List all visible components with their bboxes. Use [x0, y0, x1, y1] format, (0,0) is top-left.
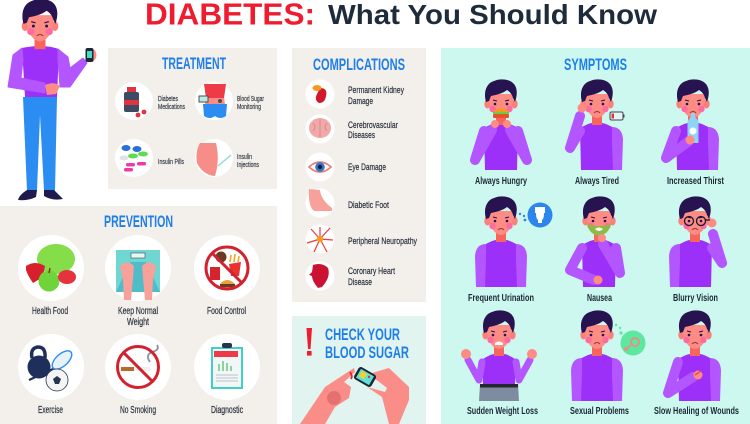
- symptom: blurry vision: Blurry Vision: [673, 292, 718, 304]
- item: diabetes medications: Diabetes: [158, 94, 178, 103]
- item: eye damage: [306, 152, 386, 182]
- symptom: sudden weight loss: [461, 310, 538, 417]
- item: diabetes medications: [115, 82, 185, 120]
- item: exercise: [18, 334, 84, 416]
- item: kidney damage: Damage: [348, 96, 373, 107]
- item: food control: Food Control: [207, 306, 246, 317]
- item: cerebrovascular diseases: Diseases: [348, 130, 375, 141]
- symptom: sexual problems: Sexual Problems: [570, 405, 629, 417]
- item: insulin pills: [115, 139, 184, 177]
- heading: prevention: PREVENTION: [104, 212, 173, 231]
- symptom: increased thirst: [666, 79, 724, 187]
- item: diagnostic: [194, 334, 260, 416]
- item: diagnostic: Diagnostic: [211, 405, 243, 416]
- item: peripheral neuropathy: [306, 224, 417, 254]
- item: kidney damage: [306, 80, 404, 108]
- item: coronary heart disease: [306, 262, 395, 290]
- panel: check your blood sugar: [292, 316, 426, 424]
- symptom: nausea: Nausea: [587, 292, 612, 304]
- item: blood sugar monitoring: Monitoring: [237, 102, 261, 111]
- title: [145, 0, 657, 32]
- item: insulin injections: Insulin: [237, 152, 252, 161]
- item: blood sugar monitoring: [195, 82, 264, 120]
- item: coronary heart disease: Coronary Heart: [348, 266, 395, 277]
- item: no smoking: [105, 334, 171, 416]
- symptom: always hungry: [475, 79, 527, 187]
- item: cerebrovascular diseases: [306, 114, 398, 144]
- item: peripheral neuropathy: Peripheral Neuropathy: [348, 236, 417, 247]
- symptom: blurry vision: [669, 196, 722, 304]
- icon: exclamation mark: [306, 328, 312, 356]
- item: kidney damage: Permanent Kidney: [348, 85, 404, 96]
- symptom: frequent urination: [468, 196, 552, 304]
- item: health food: Health Food: [32, 306, 68, 317]
- panel: symptoms: [441, 48, 750, 424]
- symptom: nausea: [570, 196, 620, 304]
- symptom: sexual problems: [570, 310, 646, 417]
- item: keep normal weight: [105, 235, 171, 328]
- heading: check your blood sugar: [325, 325, 409, 362]
- item: exercise: Exercise: [38, 405, 63, 416]
- item: health food: [18, 235, 84, 317]
- heading: check your blood sugar: CHECK YOUR: [325, 325, 400, 344]
- panel: treatment: [108, 48, 277, 189]
- item: insulin pills: Insulin Pills: [158, 157, 184, 166]
- heading: check your blood sugar: BLOOD SUGAR: [325, 343, 409, 362]
- item: keep normal weight: Weight: [127, 317, 149, 328]
- symptom: slow healing of wounds: [654, 310, 739, 417]
- item: eye damage: Eye Damage: [348, 162, 386, 173]
- item: insulin injections: [195, 139, 259, 177]
- item: insulin injections: Injections: [237, 160, 259, 169]
- illustration: man with glucose meter: [8, 0, 96, 200]
- item: coronary heart disease: Disease: [348, 277, 372, 288]
- item: blood sugar monitoring: Blood Sugar: [237, 94, 264, 103]
- symptom: always tired: [570, 79, 624, 187]
- item: diabetic foot: [306, 188, 389, 218]
- heading: symptoms: SYMPTOMS: [564, 55, 627, 74]
- heading: complications: COMPLICATIONS: [313, 55, 405, 74]
- panel: prevention: [0, 206, 277, 424]
- symptom: frequent urination: Frequent Urination: [468, 292, 534, 304]
- item: cerebrovascular diseases: Cerebrovascular: [348, 120, 398, 131]
- item: keep normal weight: Keep Normal: [118, 306, 158, 317]
- symptom: always tired: Always Tired: [575, 175, 619, 187]
- item: diabetic foot: Diabetic Foot: [348, 200, 389, 211]
- item: diabetes medications: Medications: [158, 102, 185, 111]
- symptom: always hungry: Always Hungry: [475, 175, 527, 187]
- item: no smoking: No Smoking: [120, 405, 156, 416]
- symptom: sudden weight loss: Sudden Weight Loss: [467, 405, 538, 417]
- heading: treatment: TREATMENT: [162, 54, 226, 73]
- item: food control: [194, 235, 260, 317]
- symptom: increased thirst: Increased Thirst: [667, 175, 724, 187]
- illustration: hands checking blood sugar: [300, 366, 409, 424]
- panel: complications: [292, 48, 426, 302]
